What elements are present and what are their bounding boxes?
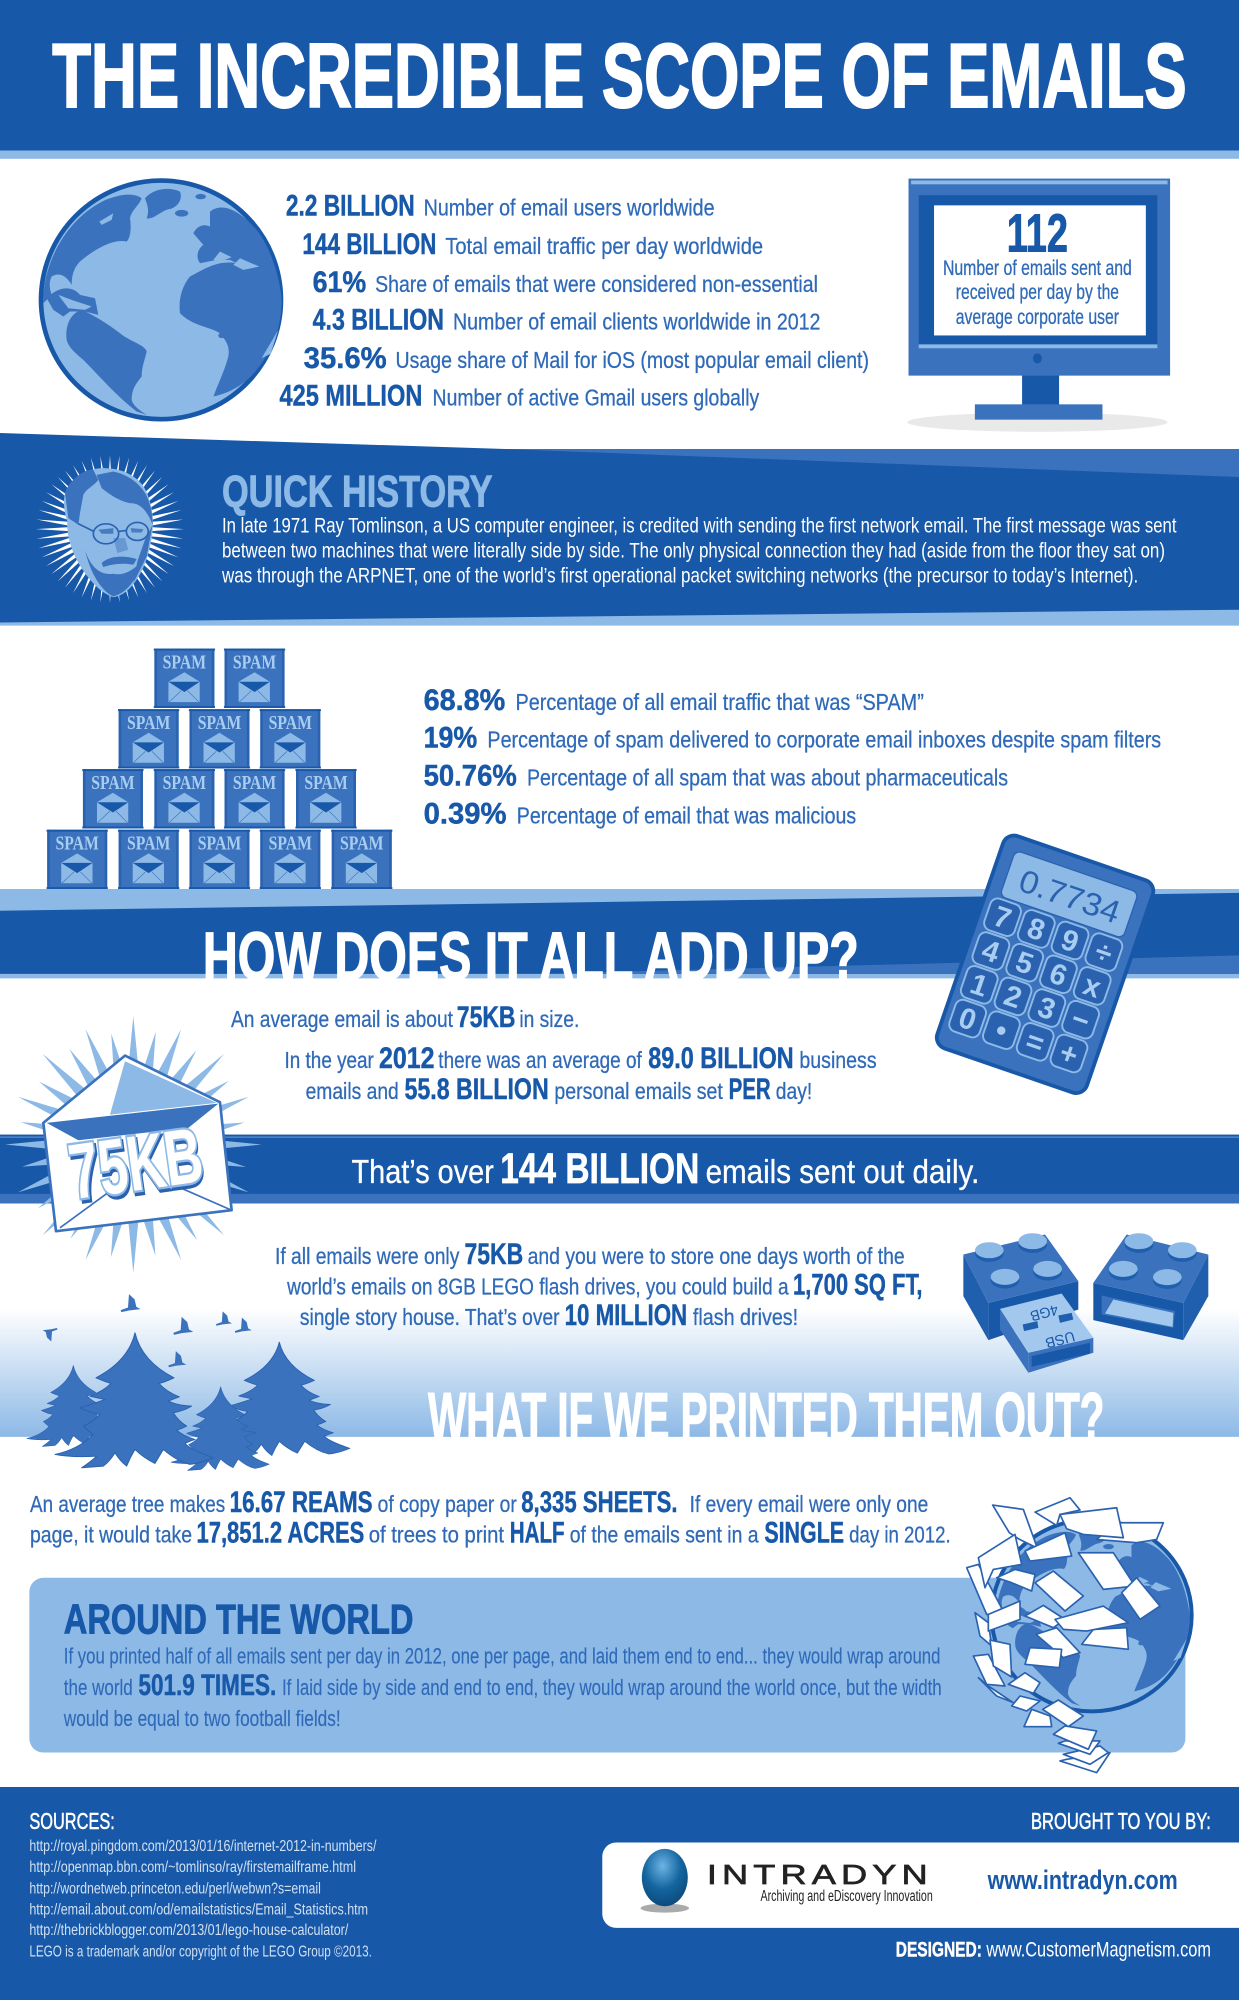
callout text <box>943 257 1132 329</box>
icon: 75KB envelope with burst <box>0 1006 272 1283</box>
callout text: Number of emails sent and <box>943 257 1132 280</box>
stat: email users: Number of email users worldwide <box>424 195 715 221</box>
text: around the world paragraph: would be equal to two football fields! <box>63 1706 341 1731</box>
text: around the world paragraph: If laid side by side and end to end, they would wrap around the world once, but the width <box>282 1675 942 1700</box>
line: reams and sheets: An average tree makes <box>30 1491 225 1517</box>
can row 2: SPAM <box>198 712 241 734</box>
text: trees required paragraph <box>30 1486 951 1550</box>
stat: malicious: Percentage of email that was malicious <box>517 802 856 828</box>
icon: trees and birds <box>27 1294 350 1470</box>
line: acres <box>30 1517 951 1550</box>
panel: 144 billion band <box>0 1135 1239 1203</box>
calculator key labels: • <box>991 1014 1011 1048</box>
can row 4: SPAM <box>127 832 170 854</box>
calculator key labels: 0 <box>954 1001 980 1038</box>
can row 3: SPAM <box>91 772 135 794</box>
calculator key labels: ÷ <box>1091 935 1117 971</box>
line: acres: of trees to print <box>369 1522 505 1548</box>
icon: computer monitor with 112 callout <box>907 179 1170 432</box>
text: 144 billion daily: 144 BILLION <box>500 1145 699 1193</box>
line: business emails: In the year <box>285 1047 374 1073</box>
text: source links: http://email.about.com/od/emailstatistics/Email_Statistics.htm <box>29 1902 368 1919</box>
line: 75KB: An average email is about <box>231 1006 453 1032</box>
panel: spam statistics <box>424 684 1161 830</box>
header band <box>0 0 1239 159</box>
can row 4: SPAM <box>56 832 99 854</box>
line: ten million: single story house. That’s over <box>300 1304 560 1330</box>
text: 144 billion daily: That’s over <box>352 1154 494 1191</box>
brick with USB: USB <box>1043 1327 1076 1350</box>
line: acres: HALF <box>510 1517 565 1550</box>
birds <box>42 1294 252 1367</box>
calculator key labels: x <box>1079 968 1106 1005</box>
line: storage: and you were to store one days worth of the <box>528 1243 905 1269</box>
stat: email users: 2.2 BILLION <box>286 190 415 223</box>
can row 4: SPAM <box>198 832 241 854</box>
text: history paragraph <box>221 513 1176 587</box>
calculator keys <box>947 896 1124 1074</box>
line: personal emails: emails and <box>306 1078 399 1104</box>
line: reams and sheets: If every email were only one <box>690 1491 928 1517</box>
line: acres: day in 2012. <box>849 1522 951 1548</box>
line: personal emails <box>306 1073 812 1106</box>
brick with socket <box>1093 1233 1208 1340</box>
can row 1: SPAM <box>233 651 276 673</box>
calculator key labels: 7 <box>989 900 1015 936</box>
stat: pharmaceuticals: Percentage of all spam that was about pharmaceuticals <box>527 765 1008 791</box>
stat: Gmail users: 425 MILLION <box>279 380 422 413</box>
text: source links: http://royal.pingdom.com/2013/01/16/internet-2012-in-numbers/ <box>29 1838 377 1855</box>
text: 75KB <box>64 1110 209 1219</box>
stat: Mail for iOS: Usage share of Mail for iOS (most popular email client) <box>396 347 869 373</box>
number 112: 112 <box>1007 203 1068 263</box>
stat: Gmail users: Number of active Gmail users globally <box>433 385 760 411</box>
can row 2 <box>118 709 321 768</box>
calculator key labels: 2 <box>1000 979 1026 1015</box>
line: business emails: 2012 <box>379 1042 434 1075</box>
text: source links: LEGO is a trademark and/or copyright of the LEGO Group ©2013. <box>29 1944 372 1961</box>
paper sheets <box>967 1498 1163 1773</box>
panel: sponsor logo box <box>602 1842 1239 1928</box>
stat: spam traffic <box>424 684 924 717</box>
calculator key labels: 4 <box>978 933 1004 970</box>
background: sky gradient <box>0 1309 1239 1437</box>
can row 2: SPAM <box>127 712 170 734</box>
text: source links: http://openmap.bbn.com/~tomlinso/ray/firstemailframe.html <box>29 1859 356 1876</box>
line: lego house: world’s emails on 8GB LEGO flash drives, you could build a <box>286 1274 789 1300</box>
text: 144 billion daily <box>352 1145 979 1193</box>
text: around the world paragraph: If you printed half of all emails sent per day in 2012, one per page, and laid them end to end... they would wrap around <box>64 1643 940 1668</box>
heading: quick history: QUICK HISTORY <box>222 467 493 516</box>
can row 1: SPAM <box>163 651 206 673</box>
icon: globe <box>41 181 282 419</box>
can row 3: SPAM <box>163 772 206 794</box>
stat: Mail for iOS <box>304 342 869 375</box>
line: personal emails: 55.8 BILLION <box>404 1073 549 1106</box>
calculator key labels <box>954 900 1117 1073</box>
calculator key labels: 8 <box>1023 911 1049 948</box>
text: around the world paragraph: 501.9 TIMES. <box>138 1669 276 1702</box>
heading: sources: SOURCES: <box>29 1808 115 1834</box>
trees <box>27 1333 350 1470</box>
line: ten million <box>300 1299 798 1332</box>
panel: footer <box>0 1787 1239 2000</box>
line: reams and sheets: 16.67 REAMS <box>230 1486 373 1519</box>
panel: quick history band <box>0 433 1239 626</box>
calculator key labels: 5 <box>1011 945 1038 982</box>
line: personal emails: day! <box>776 1078 812 1104</box>
logo tagline: Archiving and eDiscovery Innovation <box>760 1888 933 1905</box>
line: business emails: there was an average of <box>438 1047 642 1073</box>
stat: malicious: 0.39% <box>424 797 507 830</box>
brick with USB <box>963 1233 1093 1373</box>
can row 3 <box>82 769 357 828</box>
stat: email users <box>286 190 715 223</box>
calculator key labels: 9 <box>1057 923 1083 959</box>
stat: non-essential: Share of emails that were considered non-essential <box>375 271 818 297</box>
icon: Ray Tomlinson portrait with sunburst <box>31 450 189 608</box>
panel: headline statistics <box>279 190 869 413</box>
text: source links: http://thebrickblogger.com/2013/01/lego-house-calculator/ <box>29 1922 349 1939</box>
line: acres: of the emails sent in a <box>570 1522 759 1548</box>
callout text: received per day by the <box>956 281 1119 304</box>
line: lego house: 1,700 SQ FT, <box>793 1269 923 1302</box>
icon: calculator <box>934 832 1156 1096</box>
line: reams and sheets: 8,335 SHEETS. <box>521 1486 678 1519</box>
heading: around the world: AROUND THE WORLD <box>64 1595 413 1642</box>
line: 75KB <box>231 1001 579 1034</box>
icon: intradyn orb <box>641 1849 689 1913</box>
stat: malicious <box>424 797 856 830</box>
text: designed by <box>896 1937 1211 1962</box>
line: personal emails: PER <box>729 1073 771 1106</box>
line: ten million: 10 MILLION <box>565 1299 687 1332</box>
stat: spam traffic: 68.8% <box>424 684 505 717</box>
line: 75KB: 75KB <box>457 1001 516 1034</box>
line: business emails: business <box>799 1047 877 1073</box>
text: average email size <box>231 1001 877 1106</box>
line: 75KB: in size. <box>519 1006 579 1032</box>
text: source links: http://wordnetweb.princeton.edu/perl/webwn?s=email <box>29 1880 321 1897</box>
calculator key labels: = <box>1021 1024 1048 1061</box>
calculator key labels: − <box>1067 1002 1094 1039</box>
stat: Gmail users <box>279 380 760 413</box>
stat: email clients: Number of email clients worldwide in 2012 <box>453 309 820 335</box>
can row 1 <box>154 649 285 708</box>
stat: non-essential: 61% <box>313 266 366 299</box>
text: source links <box>29 1838 377 1961</box>
stat: spam delivered <box>424 721 1161 754</box>
stat: email clients <box>313 304 820 337</box>
text: around the world paragraph <box>63 1643 942 1731</box>
logo wordmark: INTRADYN <box>707 1859 933 1890</box>
text: around the world paragraph: the world <box>64 1675 133 1700</box>
sponsor url: www.intradyn.com <box>987 1865 1178 1895</box>
stat: pharmaceuticals: 50.76% <box>424 760 517 793</box>
icon: pyramid of spam cans <box>47 649 392 889</box>
calculator key labels: + <box>1055 1036 1082 1073</box>
calculator key labels: 1 <box>966 967 992 1004</box>
calculator key labels: 3 <box>1034 990 1060 1027</box>
line: acres: 17,851.2 ACRES <box>197 1517 364 1550</box>
line: acres: page, it would take <box>30 1522 192 1548</box>
icon: globe wrapped in paper <box>967 1498 1192 1773</box>
stat: non-essential <box>313 266 818 299</box>
calculator key labels: 6 <box>1045 957 1071 993</box>
stat: email clients: 4.3 BILLION <box>313 304 444 337</box>
can row 4: SPAM <box>269 832 312 854</box>
stat: pharmaceuticals <box>424 760 1008 793</box>
stat: Mail for iOS: 35.6% <box>304 342 387 375</box>
line: storage: 75KB <box>464 1238 523 1271</box>
brick with USB: 4GB <box>1028 1301 1060 1323</box>
can row 2: SPAM <box>269 712 312 734</box>
line: personal emails: personal emails set <box>554 1078 723 1104</box>
panel: how does it all add up band <box>0 889 1239 995</box>
line: ten million: flash drives! <box>693 1304 798 1330</box>
icon: calculator: 0.7734 <box>1014 862 1125 930</box>
line: reams and sheets <box>30 1486 928 1519</box>
line: business emails <box>285 1042 877 1075</box>
icon: lego USB flash drive <box>963 1233 1208 1373</box>
text: 75KB: 75KB <box>64 1110 208 1216</box>
stat: email traffic <box>302 228 763 261</box>
text: 75KB: 75KB <box>66 1114 209 1219</box>
line: business emails: 89.0 BILLION <box>648 1042 794 1075</box>
heading: how does it all add up: HOW DOES IT ALL ADD UP? <box>203 920 859 995</box>
stat: spam traffic: Percentage of all email traffic that was “SPAM” <box>516 689 924 715</box>
text: designed by: DESIGNED: <box>896 1937 982 1962</box>
line: storage <box>275 1238 905 1271</box>
stat: email traffic: Total email traffic per day worldwide <box>445 233 763 259</box>
callout text: average corporate user <box>956 306 1119 329</box>
line: reams and sheets: of copy paper or <box>378 1491 517 1517</box>
text: 144 billion daily: emails sent out daily. <box>706 1154 979 1191</box>
text: lego flash drives paragraph <box>275 1238 923 1332</box>
stat: email traffic: 144 BILLION <box>302 228 436 261</box>
line: acres: SINGLE <box>764 1517 844 1550</box>
can row 3: SPAM <box>304 772 348 794</box>
can row 4: SPAM <box>340 832 383 854</box>
stat: spam delivered: 19% <box>424 721 477 754</box>
line: storage: If all emails were only <box>275 1243 460 1269</box>
can row 3: SPAM <box>233 772 276 794</box>
can row 4 <box>47 830 392 889</box>
panel: around the world <box>29 1578 1185 1753</box>
